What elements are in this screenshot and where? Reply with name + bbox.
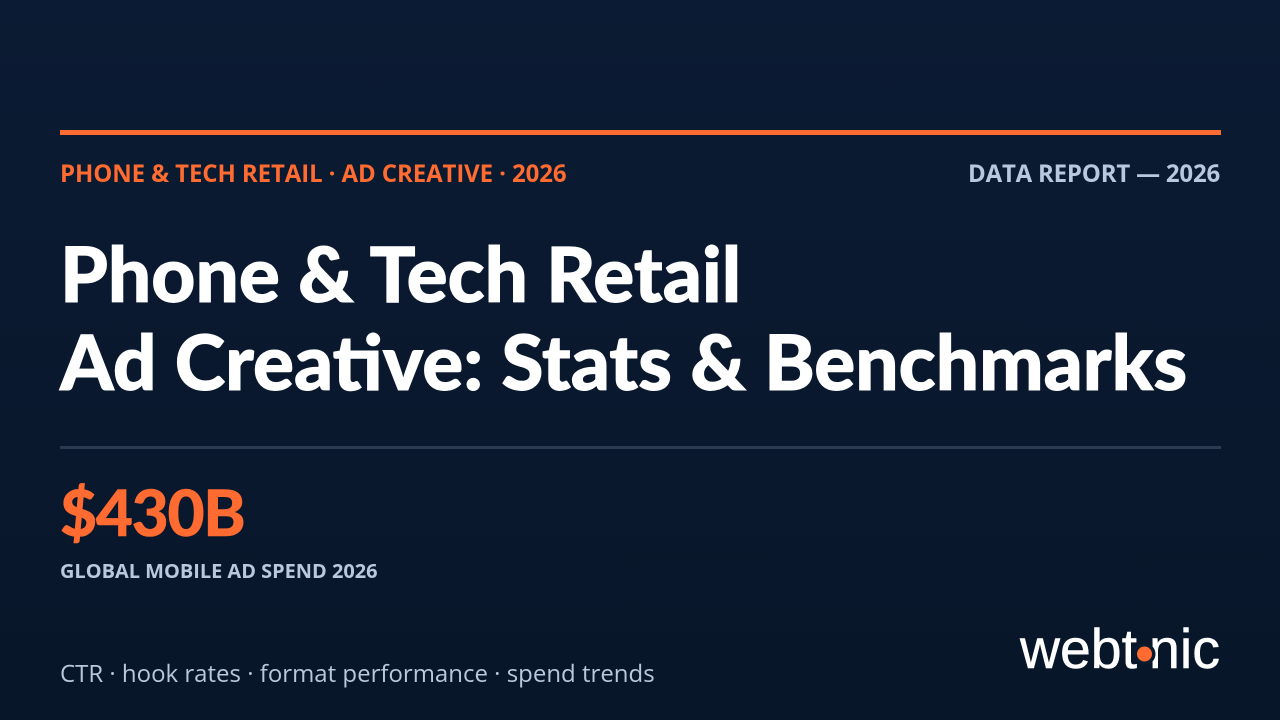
accent rule — [60, 130, 1221, 135]
stat caption: GLOBAL MOBILE AD SPEND 2026 — [60, 557, 378, 584]
report label: DATA REPORT — 2026 — [968, 157, 1220, 190]
logo: webtonic — [1019, 620, 1220, 680]
eyebrow label: PHONE & TECH RETAIL · AD CREATIVE · 2026 — [60, 157, 567, 190]
big stat: $430B — [60, 473, 244, 550]
title — [58, 227, 1187, 407]
divider — [60, 446, 1221, 449]
title: Ad Creative: Stats & Benchmarks — [60, 315, 1187, 407]
title: Phone & Tech Retail — [60, 227, 741, 319]
topic list: CTR · hook rates · format performance · spend trends — [60, 657, 655, 690]
